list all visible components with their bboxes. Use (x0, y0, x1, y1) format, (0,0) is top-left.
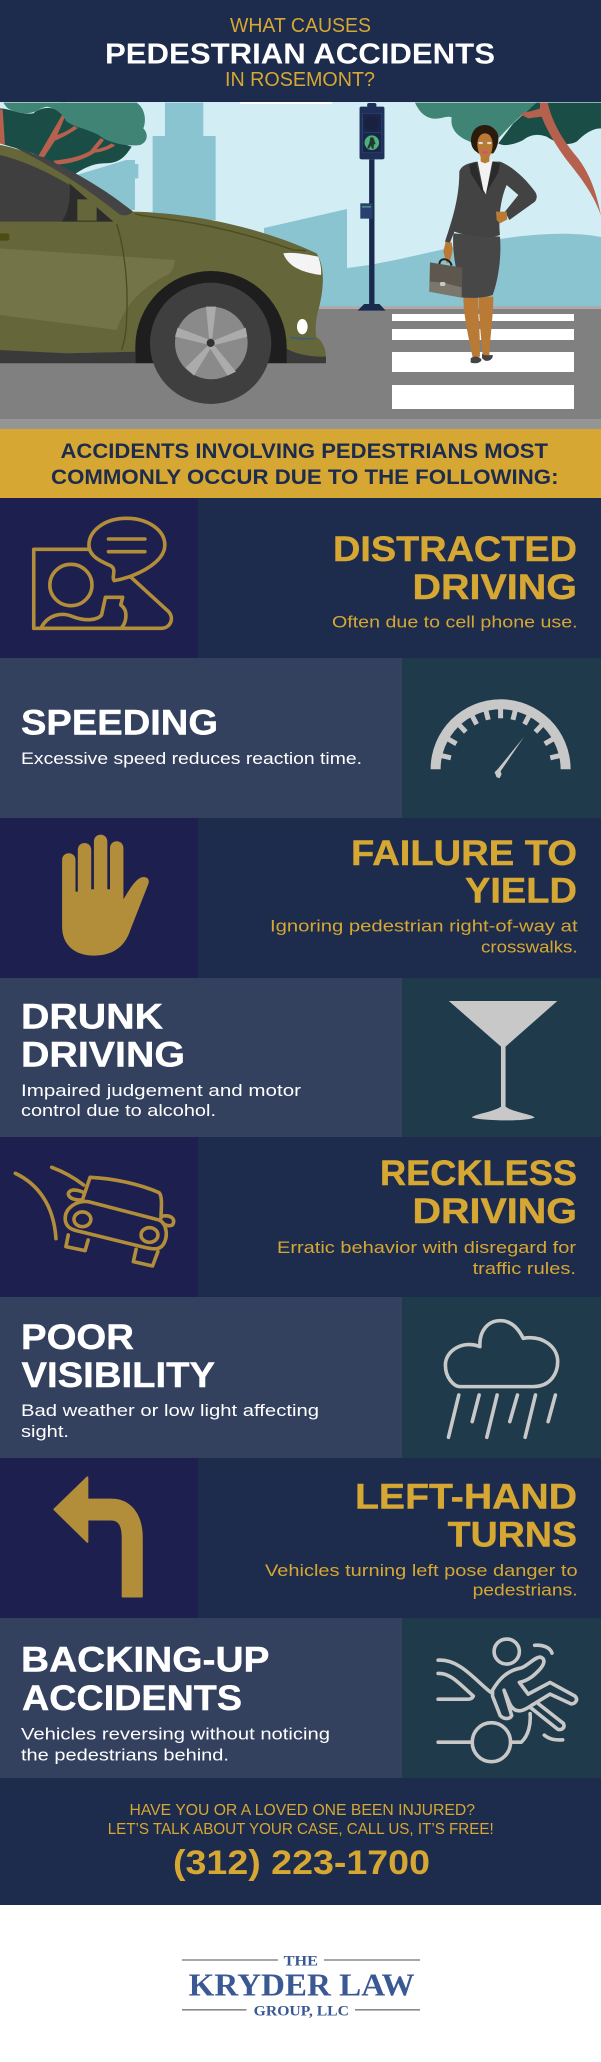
heading (355, 1478, 577, 1554)
icon: rain cloud (445, 1321, 558, 1437)
panel: street scene illustration (0, 102, 601, 429)
subheading text: ACCIDENTS INVOLVING PEDESTRIANS MOST (60, 440, 548, 463)
call to action text (108, 1802, 494, 1838)
heading: TURNS (448, 1516, 577, 1554)
icon: left turn arrow (54, 1477, 142, 1596)
heading: DRIVING (21, 1036, 185, 1075)
panel: reckless driving (0, 1137, 601, 1297)
panel: header (0, 0, 601, 103)
description: Erratic behavior with disregard for (277, 1238, 576, 1257)
logo: The Kryder Law Group (182, 1954, 420, 2020)
panel: left-hand turns (0, 1458, 601, 1618)
road (0, 306, 601, 429)
heading (21, 1640, 270, 1718)
left tree (0, 103, 147, 174)
icon: swerving car (15, 1167, 174, 1266)
description: control due to alcohol. (21, 1101, 216, 1120)
description (21, 1724, 330, 1764)
call to action text: LET’S TALK ABOUT YOUR CASE, CALL US, IT’S FREE! (108, 1821, 494, 1838)
panel: speeding (0, 658, 601, 818)
panel: failure to yield (0, 818, 601, 978)
subheading text (51, 440, 558, 489)
hills (264, 209, 601, 310)
heading: BACKING-UP (21, 1640, 270, 1680)
description: Bad weather or low light affecting (21, 1401, 319, 1420)
heading: RECKLESS (380, 1154, 577, 1193)
heading: FAILURE TO (351, 834, 577, 873)
description (21, 1081, 301, 1120)
title line 3: IN ROSEMONT? (225, 69, 375, 91)
heading: SPEEDING (21, 703, 218, 742)
description: Excessive speed reduces reaction time. (21, 749, 362, 768)
icon: martini glass (449, 1001, 557, 1120)
panel: gold subheading band (0, 429, 601, 498)
heading (333, 530, 577, 607)
logo: The Kryder Law Group: THE (284, 1954, 318, 1970)
description: traffic rules. (473, 1259, 576, 1278)
description: Impaired judgement and motor (21, 1081, 301, 1100)
description (270, 917, 578, 957)
description (21, 1401, 319, 1441)
panel: backing-up accidents (0, 1618, 601, 1778)
heading: POOR (21, 1318, 134, 1357)
call to action text: HAVE YOU OR A LOVED ONE BEEN INJURED? (130, 1802, 475, 1819)
panel: call to action (0, 1778, 601, 1905)
panel: drunk driving (0, 978, 601, 1137)
description: sight. (21, 1422, 69, 1441)
heading: DRUNK (21, 998, 163, 1037)
heading (21, 1318, 215, 1395)
description: the pedestrians behind. (21, 1746, 229, 1764)
description (265, 1561, 578, 1600)
heading (351, 834, 577, 911)
heading: DRIVING (412, 1192, 577, 1231)
heading (21, 998, 185, 1075)
phone number: (312) 223-1700 (173, 1844, 430, 1882)
woman with briefcase (429, 125, 537, 363)
heading: YIELD (465, 872, 577, 911)
logo: The Kryder Law Group: KRYDER LAW (189, 1967, 415, 2003)
description: crosswalks. (481, 938, 578, 957)
right tree (415, 103, 601, 216)
icon: raised hand (62, 835, 149, 956)
traffic signal (358, 103, 386, 311)
description: Vehicles turning left pose danger to (265, 1561, 578, 1580)
panel: poor visibility (0, 1297, 601, 1458)
heading: DRIVING (412, 568, 577, 607)
icon: pedestrian struck by car (438, 1639, 577, 1762)
description: Often due to cell phone use. (332, 613, 578, 632)
description: pedestrians. (473, 1581, 578, 1600)
heading: DISTRACTED (333, 530, 577, 569)
title line 2: PEDESTRIAN ACCIDENTS (105, 38, 495, 70)
heading: VISIBILITY (22, 1356, 215, 1395)
panel: distracted driving (0, 498, 601, 658)
description: Ignoring pedestrian right-of-way at (270, 917, 578, 936)
title line 1: WHAT CAUSES (230, 15, 371, 37)
logo: The Kryder Law Group: GROUP, LLC (254, 2004, 349, 2020)
heading: LEFT-HAND (355, 1478, 577, 1517)
buildings (77, 103, 216, 220)
subheading text: COMMONLY OCCUR DUE TO THE FOLLOWING: (51, 466, 558, 489)
description (277, 1238, 576, 1278)
icon: driver on phone (34, 518, 171, 628)
icon: speedometer (431, 699, 571, 778)
crosswalk (392, 314, 574, 409)
heading (380, 1154, 577, 1231)
car (0, 145, 326, 404)
heading: ACCIDENTS (22, 1679, 242, 1718)
description: Vehicles reversing without noticing (21, 1724, 330, 1744)
